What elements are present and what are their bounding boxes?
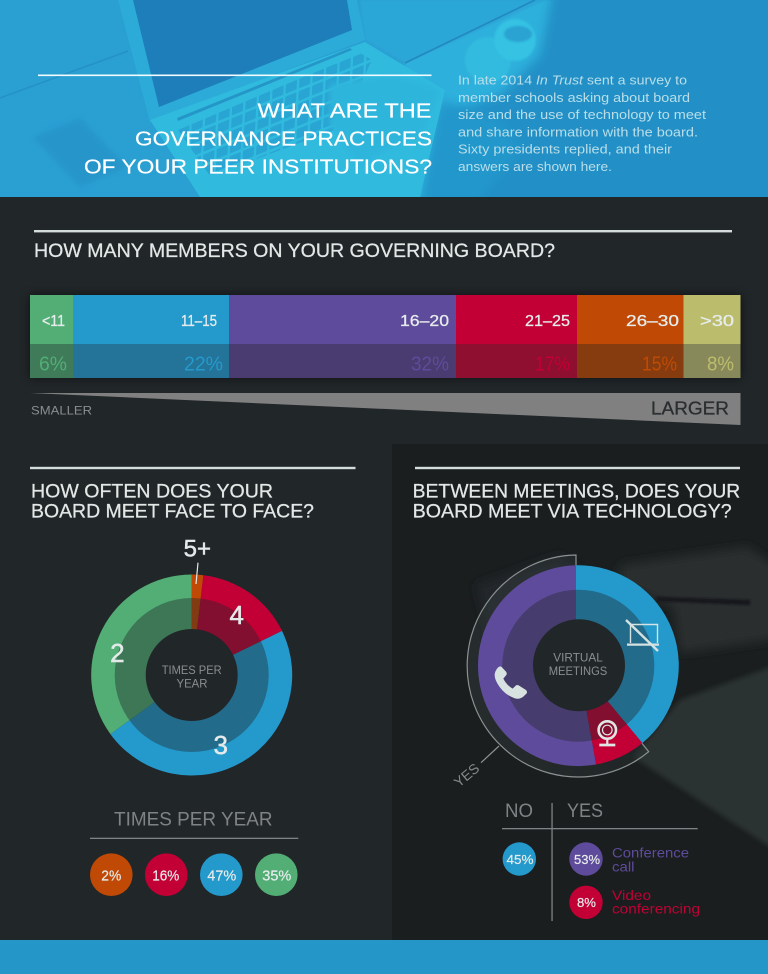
legend: times per year: 35% xyxy=(262,868,291,884)
legend: times per year: TIMES PER YEAR xyxy=(114,809,272,831)
intro paragraph: answers are shown here. xyxy=(458,159,612,174)
title: WHAT ARE THE xyxy=(258,100,432,122)
stacked bar chart: 16–20 xyxy=(400,313,449,330)
donut chart: meeting frequency: 3 xyxy=(213,730,228,760)
stacked bar chart: 8% xyxy=(707,354,734,376)
stacked bar chart: 26–30 xyxy=(626,313,679,330)
intro paragraph: In late 2014 In Trust sent a survey to xyxy=(458,73,687,88)
panel: virtual meetings xyxy=(392,444,768,940)
donut centre label: YEAR xyxy=(176,678,208,690)
stacked bar chart: 17% xyxy=(535,354,570,376)
donut chart: meeting frequency: 5+ xyxy=(184,536,211,563)
heading: between meetings: BETWEEN MEETINGS, DOES YOUR xyxy=(413,481,740,502)
heading: how many members: HOW MANY MEMBERS ON YOUR GOVERNING BOARD? xyxy=(34,241,555,262)
title: GOVERNANCE PRACTICES xyxy=(135,128,432,150)
intro paragraph: and share information with the board. xyxy=(458,124,698,140)
legend: times per year: 16% xyxy=(152,868,179,884)
donut chart: virtual meetings xyxy=(478,565,679,766)
panel: face to face meetings xyxy=(30,467,356,896)
panel photo background xyxy=(392,444,768,940)
footer bar xyxy=(0,940,768,974)
stacked bar chart: >30 xyxy=(700,313,734,330)
legend: yes and no: 8% xyxy=(577,895,596,910)
legend: yes and no: conferencing xyxy=(612,901,700,916)
heading: how often: BOARD MEET FACE TO FACE? xyxy=(31,501,314,522)
donut centre label xyxy=(549,651,607,678)
donut centre label: MEETINGS xyxy=(549,664,607,678)
header panel xyxy=(0,0,768,197)
intro paragraph: Sixty presidents replied, and their xyxy=(458,142,673,157)
stacked bar chart: 22% xyxy=(184,354,223,376)
header rule xyxy=(38,74,432,76)
legend: yes and no xyxy=(502,800,700,921)
stacked bar chart: 32% xyxy=(411,354,449,376)
icon: webcam xyxy=(599,721,616,745)
donut chart: meeting frequency: 2 xyxy=(110,638,125,668)
yes bracket arc xyxy=(451,555,649,790)
donut chart: meeting frequency: 4 xyxy=(229,600,244,630)
legend: times per year xyxy=(90,809,298,896)
section rule xyxy=(415,467,740,469)
size wedge scale: SMALLER xyxy=(31,406,92,418)
panel: board size xyxy=(30,230,740,425)
legend: yes and no: 45% xyxy=(506,852,534,867)
legend: times per year: 47% xyxy=(207,868,236,884)
section rule xyxy=(30,467,356,469)
stacked bar chart: 6% xyxy=(39,354,67,376)
heading: between meetings: BOARD MEET VIA TECHNOLOGY? xyxy=(413,501,732,522)
size wedge scale: LARGER xyxy=(651,398,729,418)
legend: yes and no: 53% xyxy=(574,852,600,867)
donut centre label: TIMES PER xyxy=(162,665,222,677)
stacked bar chart: 21–25 xyxy=(525,313,570,330)
heading: between meetings xyxy=(413,481,740,522)
legend: yes and no: Conference xyxy=(612,846,689,861)
size wedge scale xyxy=(30,393,740,425)
intro paragraph: member schools asking about board xyxy=(458,90,690,105)
yes bracket arc: YES xyxy=(451,760,482,790)
donut centre label xyxy=(162,665,222,690)
section rule xyxy=(34,230,732,232)
heading: how often: HOW OFTEN DOES YOUR xyxy=(31,481,273,502)
title xyxy=(84,100,432,178)
icon: telephone xyxy=(495,666,527,699)
donut centre label: VIRTUAL xyxy=(553,651,603,665)
header photo: laptop on desk xyxy=(0,0,768,197)
intro paragraph: size and the use of technology to meet xyxy=(458,107,706,122)
stacked bar chart: 11–15 xyxy=(181,313,217,330)
icon: crossed-out laptop xyxy=(626,620,659,651)
legend: yes and no: NO xyxy=(505,800,533,822)
legend: yes and no: call xyxy=(612,860,634,874)
donut chart: meeting frequency xyxy=(91,536,292,776)
legend: times per year: 2% xyxy=(101,868,121,884)
stacked bar chart: <11 xyxy=(42,313,65,330)
stacked bar chart xyxy=(30,295,740,378)
legend: yes and no: Video xyxy=(612,888,651,903)
title: OF YOUR PEER INSTITUTIONS? xyxy=(84,156,432,178)
legend: yes and no: YES xyxy=(567,800,603,822)
stacked bar chart: 15% xyxy=(642,354,677,376)
intro paragraph xyxy=(458,73,706,174)
heading: how often xyxy=(31,481,314,522)
